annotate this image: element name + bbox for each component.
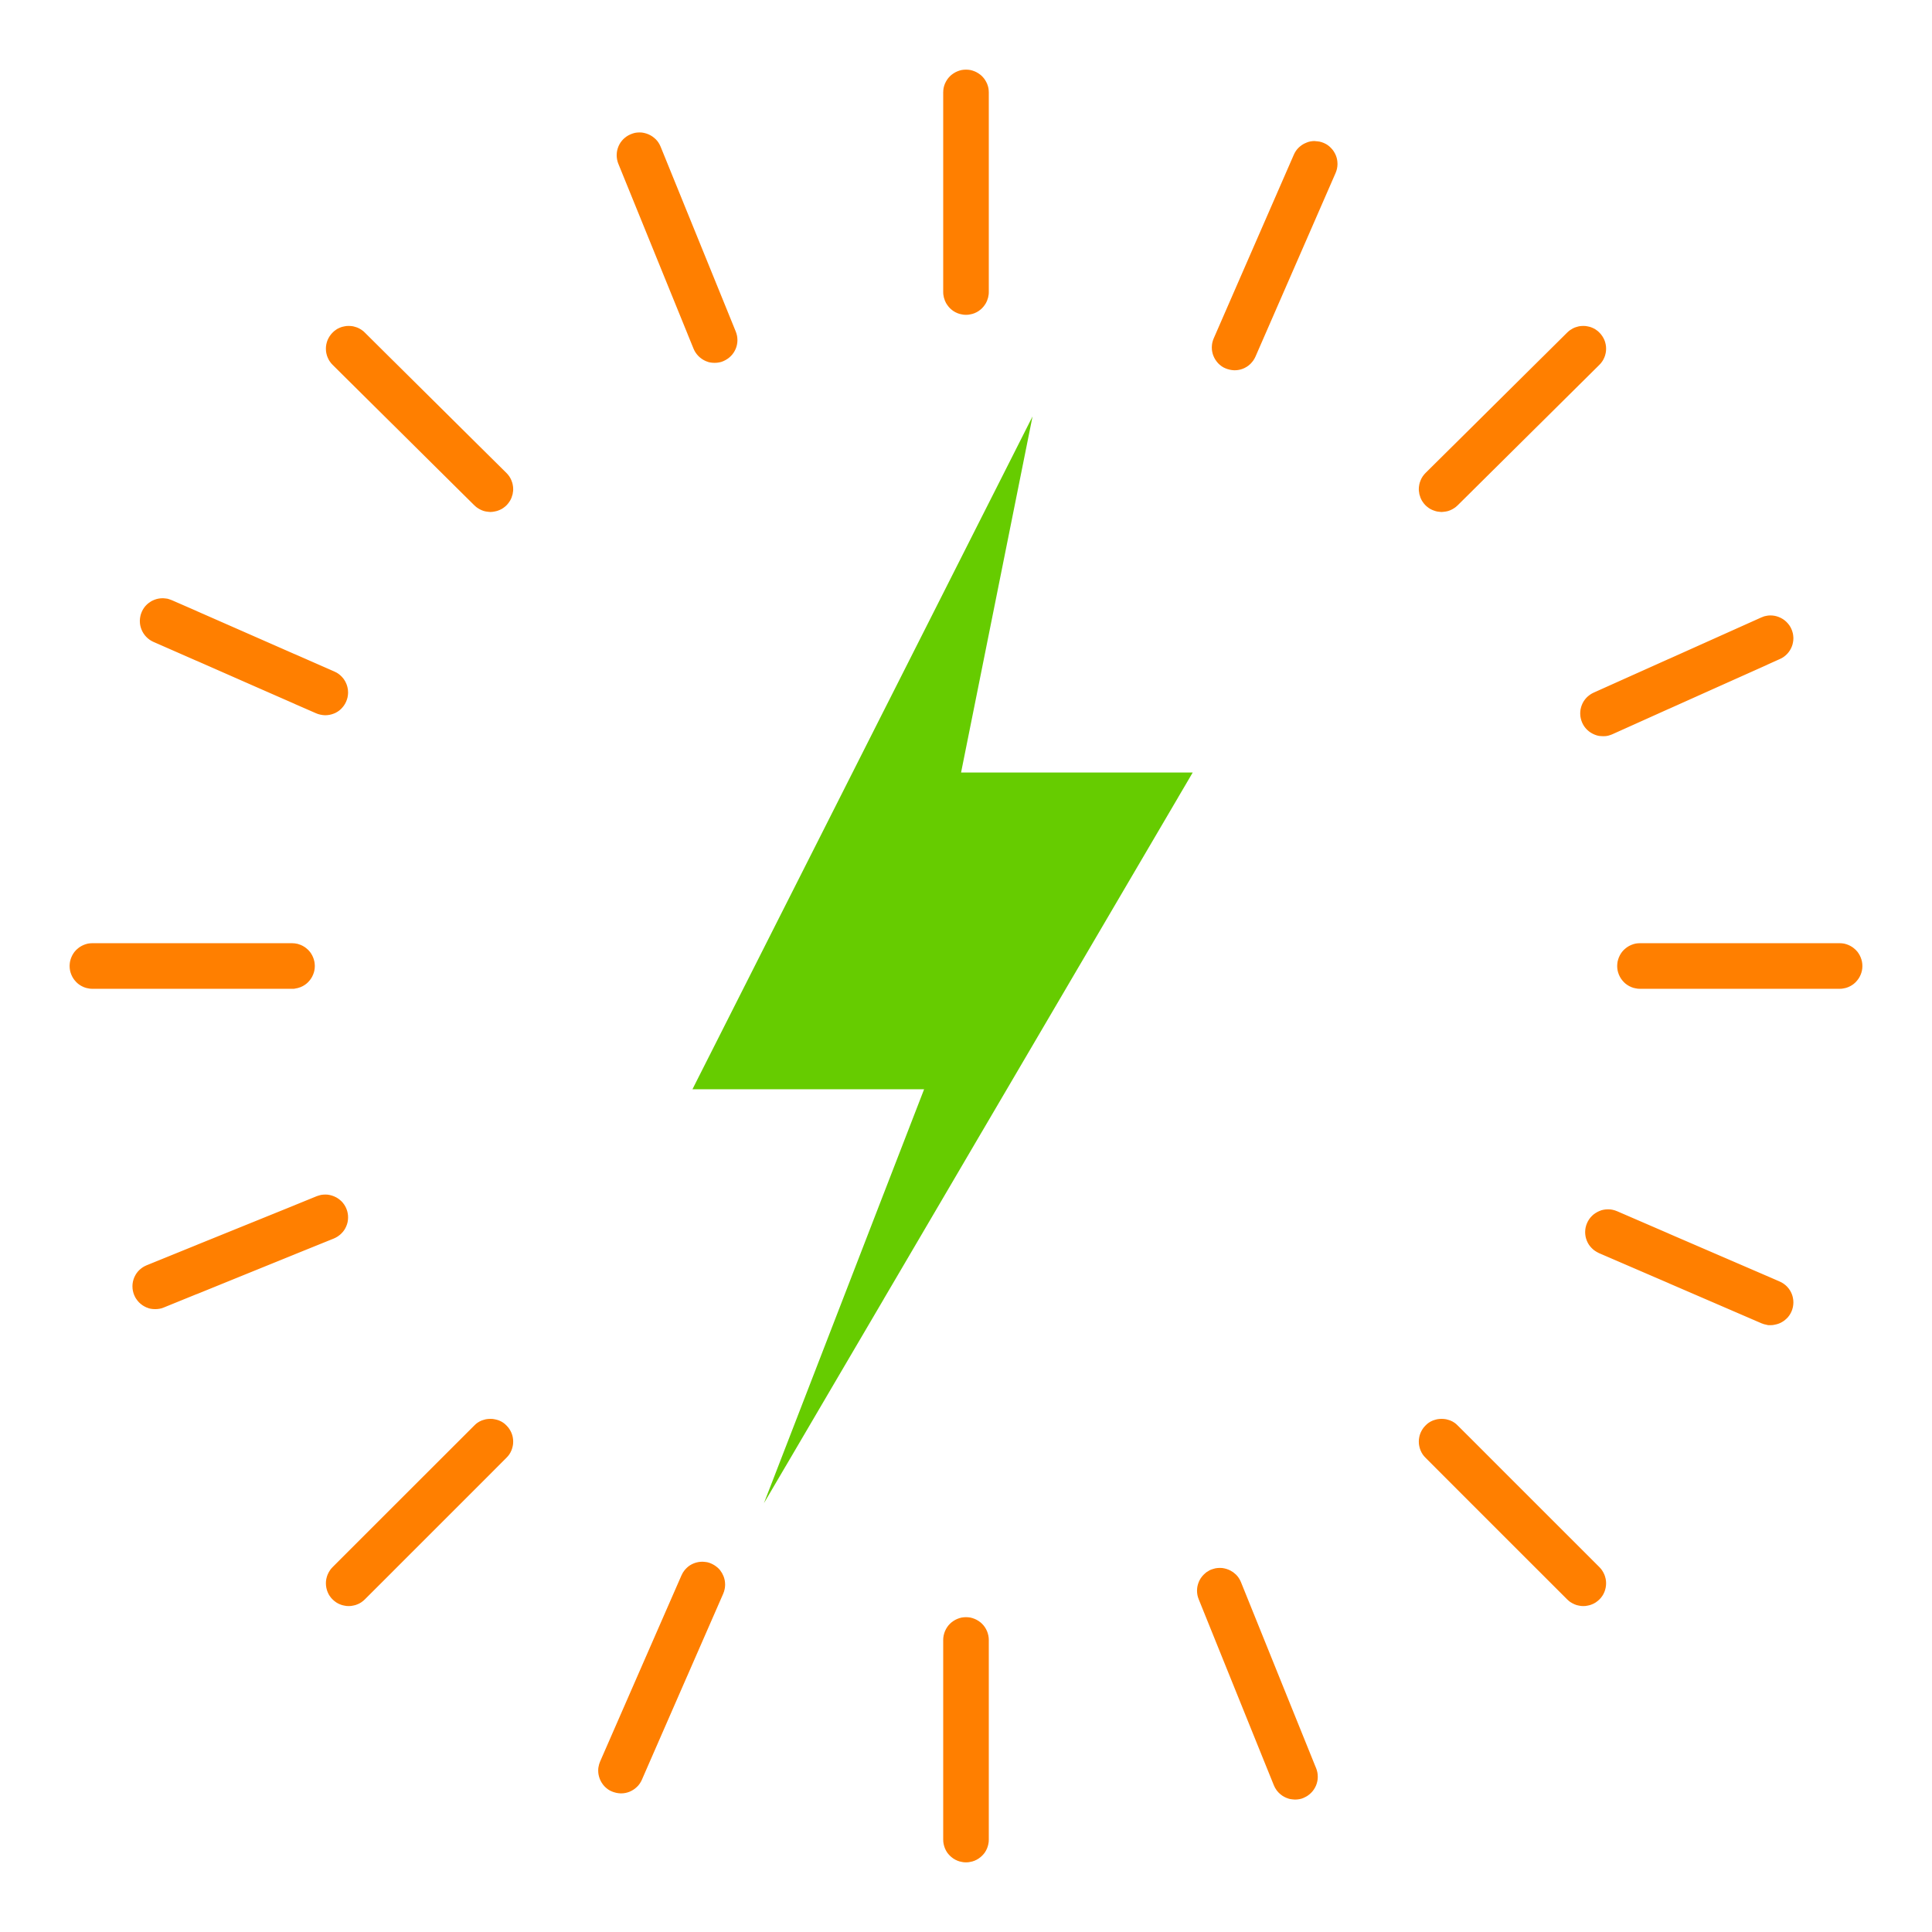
- icon: green lightning bolt: [692, 417, 1192, 1503]
